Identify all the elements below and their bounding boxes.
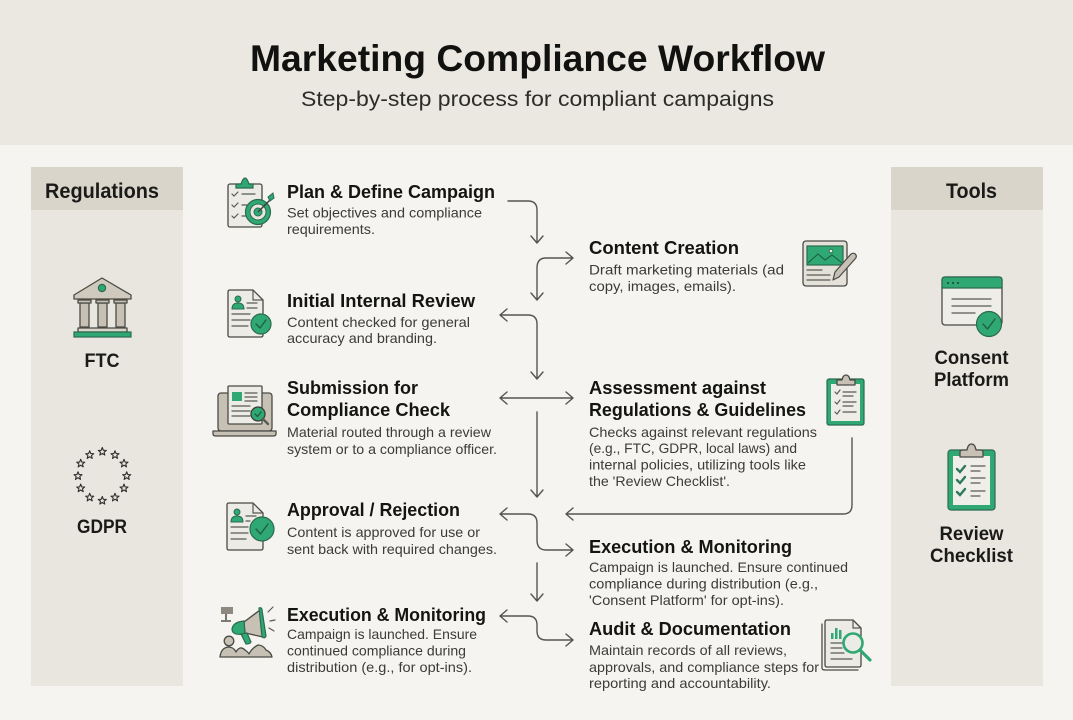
heading: Approval / Rejection <box>287 499 460 520</box>
description <box>589 642 819 691</box>
label: FTC: FTC <box>84 351 120 372</box>
header band <box>0 0 1073 145</box>
label: checklist: Checklist <box>930 546 1014 567</box>
description: Material routed through a review <box>287 424 492 440</box>
description <box>287 424 497 457</box>
description: Campaign is launched. Ensure continued <box>589 559 848 575</box>
description: Set objectives and compliance <box>287 204 482 220</box>
step: execution and monitoring (right) <box>589 536 848 608</box>
arrows: workflow connectors <box>500 201 852 646</box>
label: platform: Platform <box>934 370 1009 391</box>
description: Maintain records of all reviews, <box>589 642 787 658</box>
icon: green clipboard <box>827 375 864 425</box>
arrow: review to submission <box>500 309 543 379</box>
description <box>589 559 848 608</box>
description: compliance during distribution (e.g., <box>589 576 818 592</box>
step: submission for compliance check <box>213 377 497 457</box>
heading: Initial Internal Review <box>287 290 476 311</box>
icon: megaphone and audience <box>220 607 275 657</box>
description <box>287 314 470 346</box>
icon: clipboard with target <box>228 178 274 227</box>
heading: Regulations & Guidelines <box>589 399 806 420</box>
heading: Compliance Check <box>287 399 451 420</box>
heading <box>287 377 451 420</box>
arrow: submission and assessment two-way <box>500 392 573 404</box>
step: initial internal review <box>228 290 476 346</box>
subtitle: Step-by-step process for compliant campaigns <box>301 87 774 111</box>
icon: consent platform window <box>942 277 1002 336</box>
icon: FTC bank building <box>74 278 131 337</box>
description: Content checked for general <box>287 314 470 330</box>
icon: image with pencil <box>803 241 856 286</box>
step: audit and documentation <box>589 618 870 691</box>
icon: laptop with document <box>213 386 276 436</box>
description <box>287 626 477 675</box>
description: Draft marketing materials (ad <box>589 262 784 278</box>
description: 'Consent Platform' for opt-ins). <box>589 592 784 608</box>
heading: Execution & Monitoring <box>287 604 486 625</box>
heading <box>589 377 806 420</box>
arrow: execution down <box>531 563 543 601</box>
arrow: content creation to internal review <box>531 252 573 300</box>
description: sent back with required changes. <box>287 541 497 557</box>
description: approvals, and compliance steps for <box>589 659 819 675</box>
label: consent platform: Consent <box>934 348 1009 369</box>
heading: Audit & Documentation <box>589 618 791 639</box>
description: accuracy and branding. <box>287 330 437 346</box>
description: the 'Review Checklist'. <box>589 473 730 489</box>
description <box>287 524 497 557</box>
arrow: submission to approval <box>531 412 543 497</box>
heading: Execution & Monitoring <box>589 536 792 557</box>
heading: Assessment against <box>589 377 766 398</box>
step: execution and monitoring (left) <box>220 604 486 675</box>
description <box>589 262 784 294</box>
panel heading: tools: Tools <box>946 180 997 203</box>
description: requirements. <box>287 221 375 237</box>
description: Campaign is launched. Ensure <box>287 626 477 642</box>
arrow: execution to audit <box>500 610 573 646</box>
description: system or to a compliance officer. <box>287 441 497 457</box>
description: (e.g., FTC, GDPR, local laws) and <box>589 440 797 456</box>
icon: document with magnifier <box>822 620 870 670</box>
description: reporting and accountability. <box>589 675 771 691</box>
label: review: Review <box>940 524 1004 545</box>
heading: Content Creation <box>589 237 739 258</box>
arrow: plan to content creation <box>508 201 543 243</box>
panel: tools <box>891 167 1043 686</box>
description <box>287 204 482 237</box>
description: Content is approved for use or <box>287 524 480 540</box>
icon: review checklist clipboard <box>948 444 995 510</box>
step: approval or rejection <box>227 499 497 557</box>
title: Marketing Compliance Workflow <box>250 38 825 79</box>
arrow: assessment back to approval <box>566 438 852 520</box>
icon: document with large check <box>227 503 274 550</box>
description: continued compliance during <box>287 642 466 658</box>
heading: Submission for <box>287 377 418 398</box>
icon: GDPR star ring <box>74 448 131 504</box>
description: Checks against relevant regulations <box>589 424 817 440</box>
description: distribution (e.g., for opt-ins). <box>287 659 472 675</box>
icon: document with check <box>228 290 271 337</box>
step: assessment against regulations <box>589 375 864 489</box>
description: internal policies, utilizing tools like <box>589 456 806 472</box>
panel: regulations <box>31 167 183 686</box>
heading: Plan & Define Campaign <box>287 181 495 202</box>
step: plan and define campaign <box>228 178 495 237</box>
description: copy, images, emails). <box>589 278 736 294</box>
label: GDPR: GDPR <box>77 517 127 538</box>
description <box>589 424 817 489</box>
step: content creation <box>589 237 856 294</box>
arrow: approval to execution <box>500 508 573 556</box>
panel heading: regulations: Regulations <box>45 180 159 203</box>
